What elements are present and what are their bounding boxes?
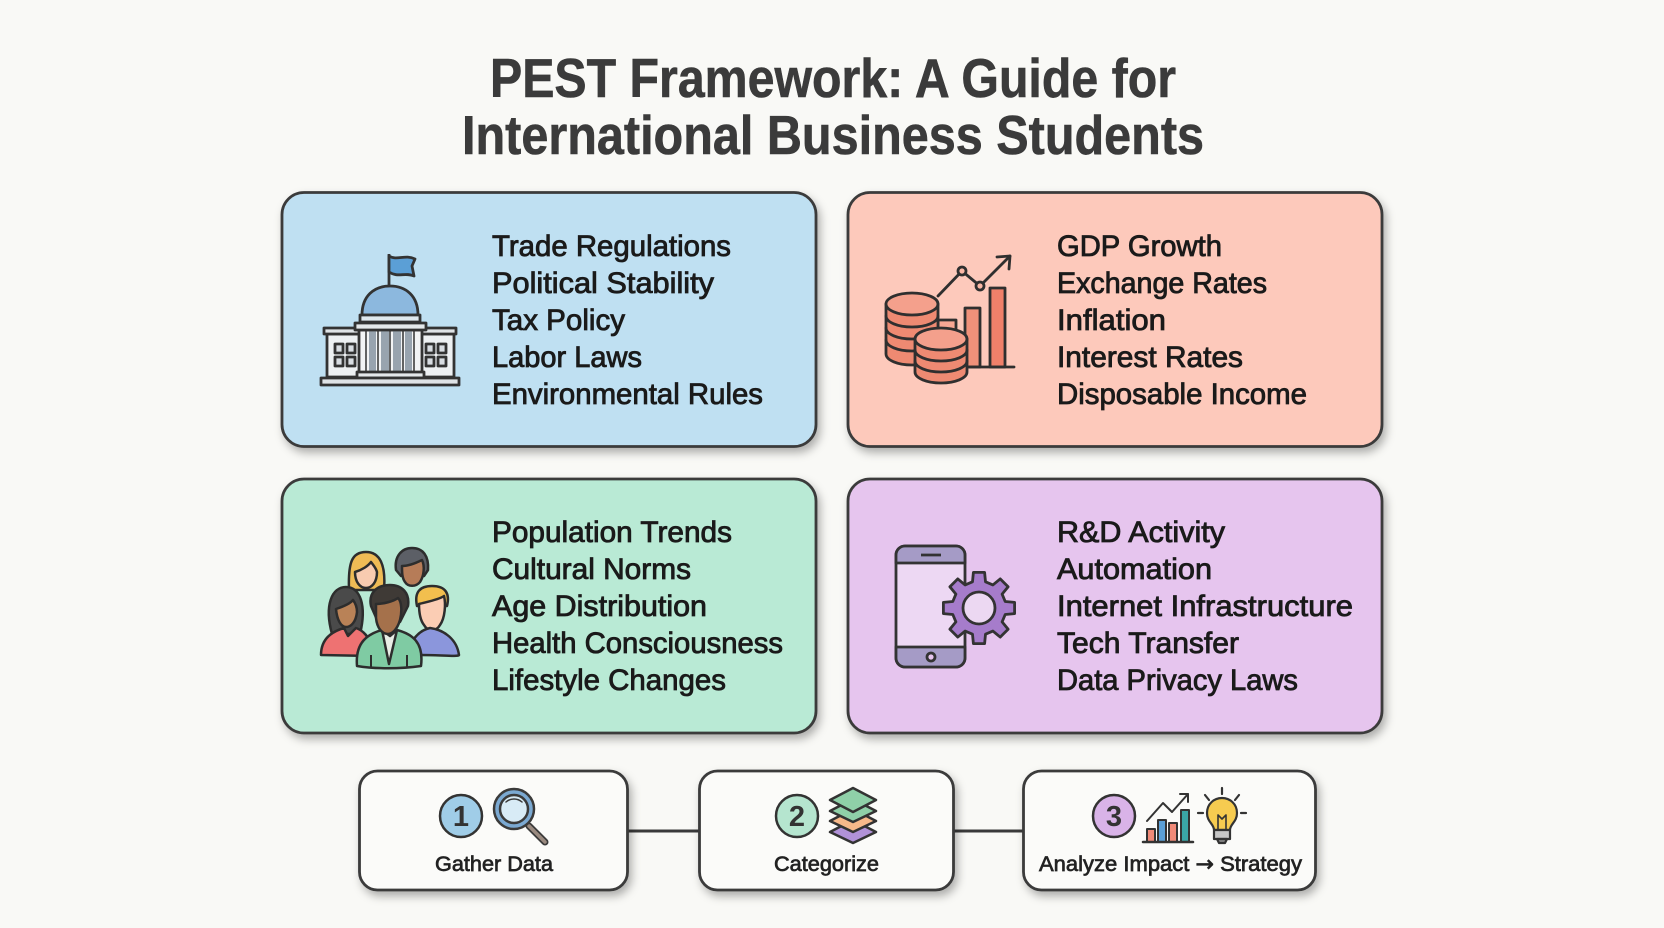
title: PEST Framework: A Guide for <box>490 47 1176 109</box>
icon: group of people <box>321 548 459 668</box>
connector: step 2 to step 3 <box>954 830 1023 832</box>
text: social factors: Population Trends <box>492 516 732 549</box>
text: technological factors: Tech Transfer <box>1057 627 1239 660</box>
panel: economic <box>848 192 1382 446</box>
text: social factors: Cultural Norms <box>492 553 691 586</box>
label: gather data: Gather Data <box>435 852 553 876</box>
text: political factors: Labor Laws <box>492 341 642 374</box>
step 2: categorize <box>700 771 954 890</box>
text: economic factors: Interest Rates <box>1057 341 1243 374</box>
badge: number 1: 1 <box>453 801 469 833</box>
text: technological factors: Internet Infrastructure <box>1057 590 1353 623</box>
icon: stacked layers <box>830 788 876 843</box>
text: economic factors <box>1057 230 1307 411</box>
text: economic factors: Exchange Rates <box>1057 267 1267 300</box>
connector: step 1 to step 2 <box>628 830 699 832</box>
icon: chart with rising arrow <box>1143 794 1193 842</box>
text: economic factors: Inflation <box>1057 304 1166 337</box>
text: social factors: Age Distribution <box>492 590 707 623</box>
icon: magnifying glass <box>494 789 545 842</box>
text: political factors: Trade Regulations <box>492 230 731 263</box>
text: political factors <box>492 230 763 411</box>
icon: light bulb <box>1198 788 1246 843</box>
icon: coins and growth chart <box>886 256 1014 383</box>
title: International Business Students <box>462 104 1204 166</box>
label: analyze impact to strategy: Analyze Impact → Strategy <box>1039 852 1302 877</box>
badge: number 3: 3 <box>1106 801 1122 833</box>
title <box>462 47 1204 166</box>
text: technological factors <box>1057 516 1353 697</box>
text: economic factors: GDP Growth <box>1057 230 1222 263</box>
badge: number 1 <box>440 795 482 837</box>
label: categorize: Categorize <box>774 852 879 876</box>
text: social factors: Health Consciousness <box>492 627 783 660</box>
text: social factors <box>492 516 783 697</box>
panel: political <box>282 192 816 446</box>
text: technological factors: Automation <box>1057 553 1212 586</box>
icon: smartphone and gear <box>896 546 1015 667</box>
panel: social <box>282 479 816 733</box>
step 3: analyze impact to strategy <box>1024 771 1316 890</box>
text: political factors: Tax Policy <box>492 304 625 337</box>
badge: number 3 <box>1093 795 1135 837</box>
panel: technological <box>848 479 1382 733</box>
text: technological factors: R&D Activity <box>1057 516 1225 549</box>
text: technological factors: Data Privacy Laws <box>1057 664 1298 697</box>
text: political factors: Political Stability <box>492 267 714 300</box>
icon: government building <box>321 254 459 385</box>
badge: number 2: 2 <box>789 801 805 833</box>
text: social factors: Lifestyle Changes <box>492 664 726 697</box>
badge: number 2 <box>776 795 818 837</box>
text: political factors: Environmental Rules <box>492 378 763 411</box>
text: economic factors: Disposable Income <box>1057 378 1307 411</box>
step 1: gather data <box>360 771 628 890</box>
